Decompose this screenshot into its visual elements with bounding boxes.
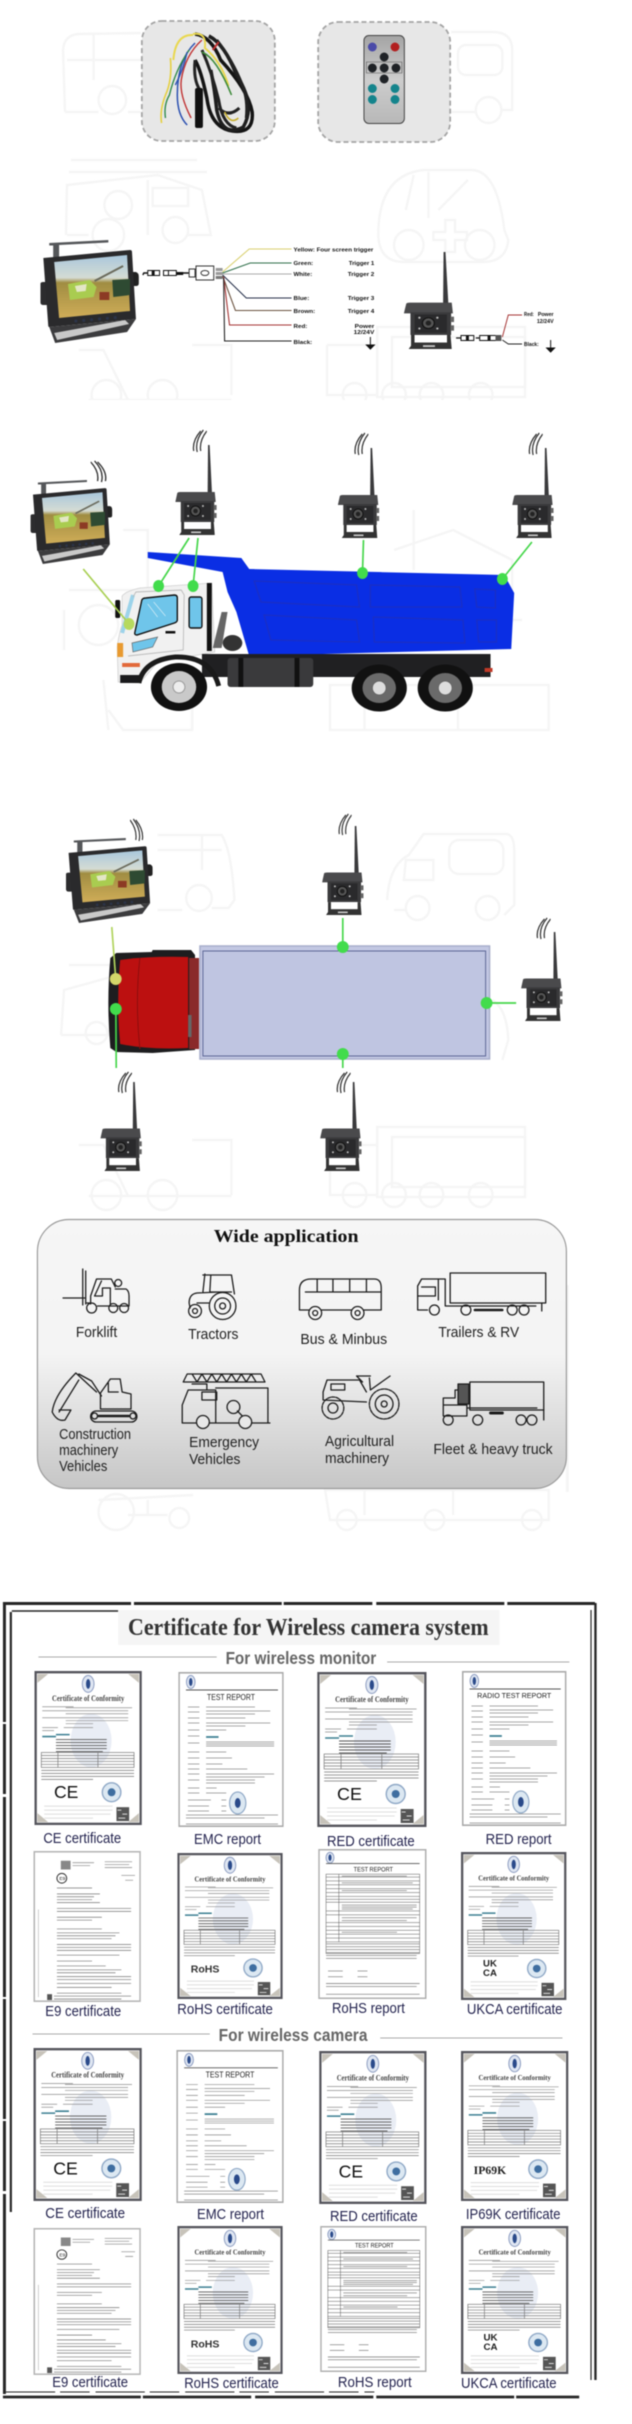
RoHS report [319, 1850, 426, 2017]
icon: camera 1 [175, 445, 217, 535]
RED report: RADIO TEST REPORT [477, 1691, 552, 1700]
camera wire labels: Power [538, 312, 554, 318]
RoHS certificate camera [178, 2227, 282, 2392]
certificate frame [3, 1602, 595, 2397]
icon: camera 2 signal [355, 433, 368, 455]
panel: accessory wiring cable [142, 21, 275, 141]
RoHS certificate: RoHS [191, 1965, 219, 1976]
UKCA certificate camera: UKCA certificate [461, 2376, 557, 2392]
item: trailers and RV [418, 1273, 546, 1341]
item: tractors: Tractors [188, 1327, 238, 1343]
CE certificate: CE [54, 1782, 79, 1802]
CE certificate: CE certificate [43, 1831, 121, 1847]
item: trailers and RV: Trailers & RV [438, 1325, 520, 1341]
background: faint vehicle outlines top [63, 32, 525, 410]
UKCA certificate camera: Certificate of Conformity [479, 2248, 551, 2257]
RED certificate camera: Certificate of Conformity [337, 2074, 409, 2083]
camera wire labels: 12/24V [537, 319, 554, 325]
item: agricultural machinery: machinery [325, 1451, 390, 1467]
CE certificate: Certificate of Conformity [52, 1694, 124, 1703]
panel: certificates [3, 1602, 595, 2397]
item: agricultural machinery: Agricultural [325, 1434, 394, 1450]
E9 certificate camera: E9 [59, 2252, 66, 2258]
RED certificate [318, 1673, 425, 1850]
E9 certificate camera [34, 2229, 140, 2391]
icon: ground symbol [366, 337, 374, 349]
panel: remote control [318, 22, 450, 142]
background: faint vehicle outlines top view section [61, 834, 525, 1210]
UKCA certificate: UK [483, 1959, 497, 1970]
RED certificate camera [320, 2052, 425, 2225]
certificate title: Certificate for Wireless camera system [128, 1615, 489, 1641]
icon: right camera signal [537, 918, 551, 939]
sub-heading: camera [33, 2025, 562, 2045]
icon: camera 3 [512, 448, 554, 538]
icon: camera 3 signal [529, 433, 543, 455]
wires [223, 249, 292, 341]
wire labels: Blue: [294, 296, 309, 302]
icon: monitor signal [130, 819, 143, 841]
CE certificate camera [35, 2049, 141, 2222]
UKCA certificate: CA [483, 1968, 497, 1979]
icon: lower left camera [100, 1082, 142, 1171]
icon: monitor [40, 240, 139, 343]
E9 certificate camera: E9 certificate [52, 2375, 128, 2391]
icon: monitor [66, 838, 153, 923]
panel: top view installation [66, 814, 562, 1171]
icon: lower middle camera [320, 1082, 362, 1171]
item: agricultural machinery [322, 1376, 399, 1467]
item: bus and minibus [299, 1279, 387, 1348]
wire labels: Black: [294, 340, 312, 346]
camera wire labels [524, 312, 554, 348]
connectors: camera to truck [112, 918, 516, 1068]
RoHS report camera [321, 2227, 426, 2391]
wire labels: Yellow: Four screen trigger [294, 247, 374, 254]
UKCA certificate: Certificate of Conformity [478, 1874, 549, 1883]
IP69K certificate [462, 2052, 567, 2223]
wire labels: White: [294, 272, 312, 278]
cable tile [142, 21, 275, 141]
sub-heading: monitor [38, 1648, 569, 1668]
illustration: truck from above [108, 946, 490, 1059]
UKCA certificate camera: CA [483, 2342, 498, 2353]
RED certificate: CE [337, 1784, 362, 1804]
wire labels: Power [355, 324, 375, 330]
wire labels: Green: [294, 261, 313, 267]
icon: top camera [322, 826, 363, 915]
RoHS certificate camera: RoHS [191, 2338, 219, 2350]
icon: lower left camera signal [119, 1072, 132, 1093]
CE certificate camera: CE [53, 2158, 78, 2178]
IP69K certificate: IP69K [474, 2164, 506, 2177]
icon: camera ground symbol [547, 340, 555, 352]
item: fleet and heavy truck: Fleet & heavy truck [433, 1442, 553, 1458]
camera wire labels: Black: [524, 342, 539, 348]
wire labels: 12/24V [354, 330, 374, 336]
RED certificate: Certificate of Conformity [335, 1695, 409, 1704]
item: forklift [63, 1269, 129, 1341]
connectors: camera to truck [83, 538, 532, 624]
UKCA certificate: UKCA certificate [467, 2002, 562, 2018]
item: construction machinery: Construction [59, 1427, 131, 1443]
background: faint vehicle outlines below application panel [99, 1285, 567, 1530]
IP69K certificate: IP69K certificate [466, 2207, 560, 2223]
panel background [37, 1220, 566, 1488]
item: emergency vehicles [182, 1374, 270, 1468]
icon: right camera [521, 932, 562, 1021]
E9 certificate [34, 1852, 140, 2020]
item: forklift: Forklift [76, 1325, 117, 1341]
icon: remote [364, 36, 404, 124]
wire labels: Trigger 1 [349, 261, 375, 267]
panel: wide application [37, 1220, 566, 1488]
EMC report: TEST REPORT [207, 1693, 255, 1702]
background: faint vehicle outlines dump truck section [64, 510, 549, 730]
wire labels [294, 247, 375, 346]
RoHS certificate: Certificate of Conformity [195, 1874, 266, 1883]
icon: coiled cable with coloured wires [161, 34, 252, 131]
icon: monitor [31, 480, 112, 564]
EMC report: EMC report [194, 1832, 261, 1848]
wire labels: Trigger 3 [348, 296, 374, 302]
RED certificate camera: CE [339, 2161, 363, 2181]
RED report: RED report [486, 1832, 552, 1848]
RoHS certificate [177, 1854, 282, 2018]
icon: monitor signal [91, 461, 106, 482]
sub-heading: camera: For wireless camera [219, 2025, 368, 2045]
E9 certificate: E9 certificate [45, 2004, 121, 2020]
EMC report [179, 1673, 283, 1848]
E9 certificate: E9 [59, 1876, 66, 1882]
RoHS certificate camera: Certificate of Conformity [195, 2248, 266, 2257]
wire labels: Brown: [294, 309, 315, 315]
RED certificate camera: RED certificate [330, 2209, 418, 2225]
CE certificate camera: CE certificate [45, 2206, 125, 2222]
item: emergency vehicles: Emergency [189, 1435, 260, 1451]
RoHS report: RoHS report [332, 2001, 405, 2017]
RoHS certificate camera: RoHS certificate [184, 2376, 279, 2392]
icon: camera connector [456, 315, 522, 344]
sub-heading: monitor: For wireless monitor [226, 1648, 376, 1668]
UKCA certificate [462, 1853, 565, 2018]
illustration: dump truck [115, 552, 514, 712]
panel: wiring diagram [40, 240, 555, 352]
RoHS report: TEST REPORT [354, 1866, 393, 1873]
item: construction machinery: Vehicles [59, 1459, 107, 1475]
CE certificate [36, 1672, 141, 1847]
RoHS report camera: RoHS report [338, 2375, 412, 2391]
UKCA certificate camera: UK [483, 2333, 498, 2344]
item: fleet and heavy truck [433, 1382, 553, 1458]
item: construction machinery [52, 1373, 137, 1475]
item: tractors [188, 1274, 238, 1343]
icon: top camera signal [339, 814, 352, 835]
connector dots [124, 567, 508, 630]
icon: connector and trigger box [143, 266, 223, 280]
wire labels: Trigger 4 [348, 309, 375, 315]
EMC report camera [177, 2051, 283, 2223]
icon: lower middle camera signal [337, 1072, 351, 1093]
EMC report camera: EMC report [197, 2207, 264, 2223]
heading: Wide application [214, 1226, 359, 1246]
camera wire labels: Red: [524, 312, 534, 318]
icon: wired camera [404, 252, 454, 349]
item: construction machinery: machinery [59, 1443, 119, 1459]
icon: camera 1 signal [193, 430, 207, 452]
EMC report camera: TEST REPORT [206, 2071, 255, 2080]
UKCA certificate camera [461, 2227, 567, 2392]
RED report [463, 1672, 566, 1848]
panel: dump truck installation [31, 430, 554, 712]
RoHS certificate: RoHS certificate [177, 2002, 273, 2018]
connector dots [110, 941, 493, 1060]
remote tile [318, 22, 450, 142]
icon: camera 2 [338, 448, 379, 538]
RoHS report camera: TEST REPORT [355, 2243, 394, 2250]
item: emergency vehicles: Vehicles [189, 1452, 240, 1468]
icon: plug [195, 88, 203, 128]
wire labels: Red: [294, 324, 307, 330]
IP69K certificate: Certificate of Conformity [479, 2073, 551, 2082]
item: bus and minibus: Bus & Minbus [300, 1332, 387, 1348]
RED certificate: RED certificate [327, 1834, 415, 1850]
CE certificate camera: Certificate of Conformity [51, 2071, 124, 2080]
wire labels: Trigger 2 [348, 272, 374, 278]
